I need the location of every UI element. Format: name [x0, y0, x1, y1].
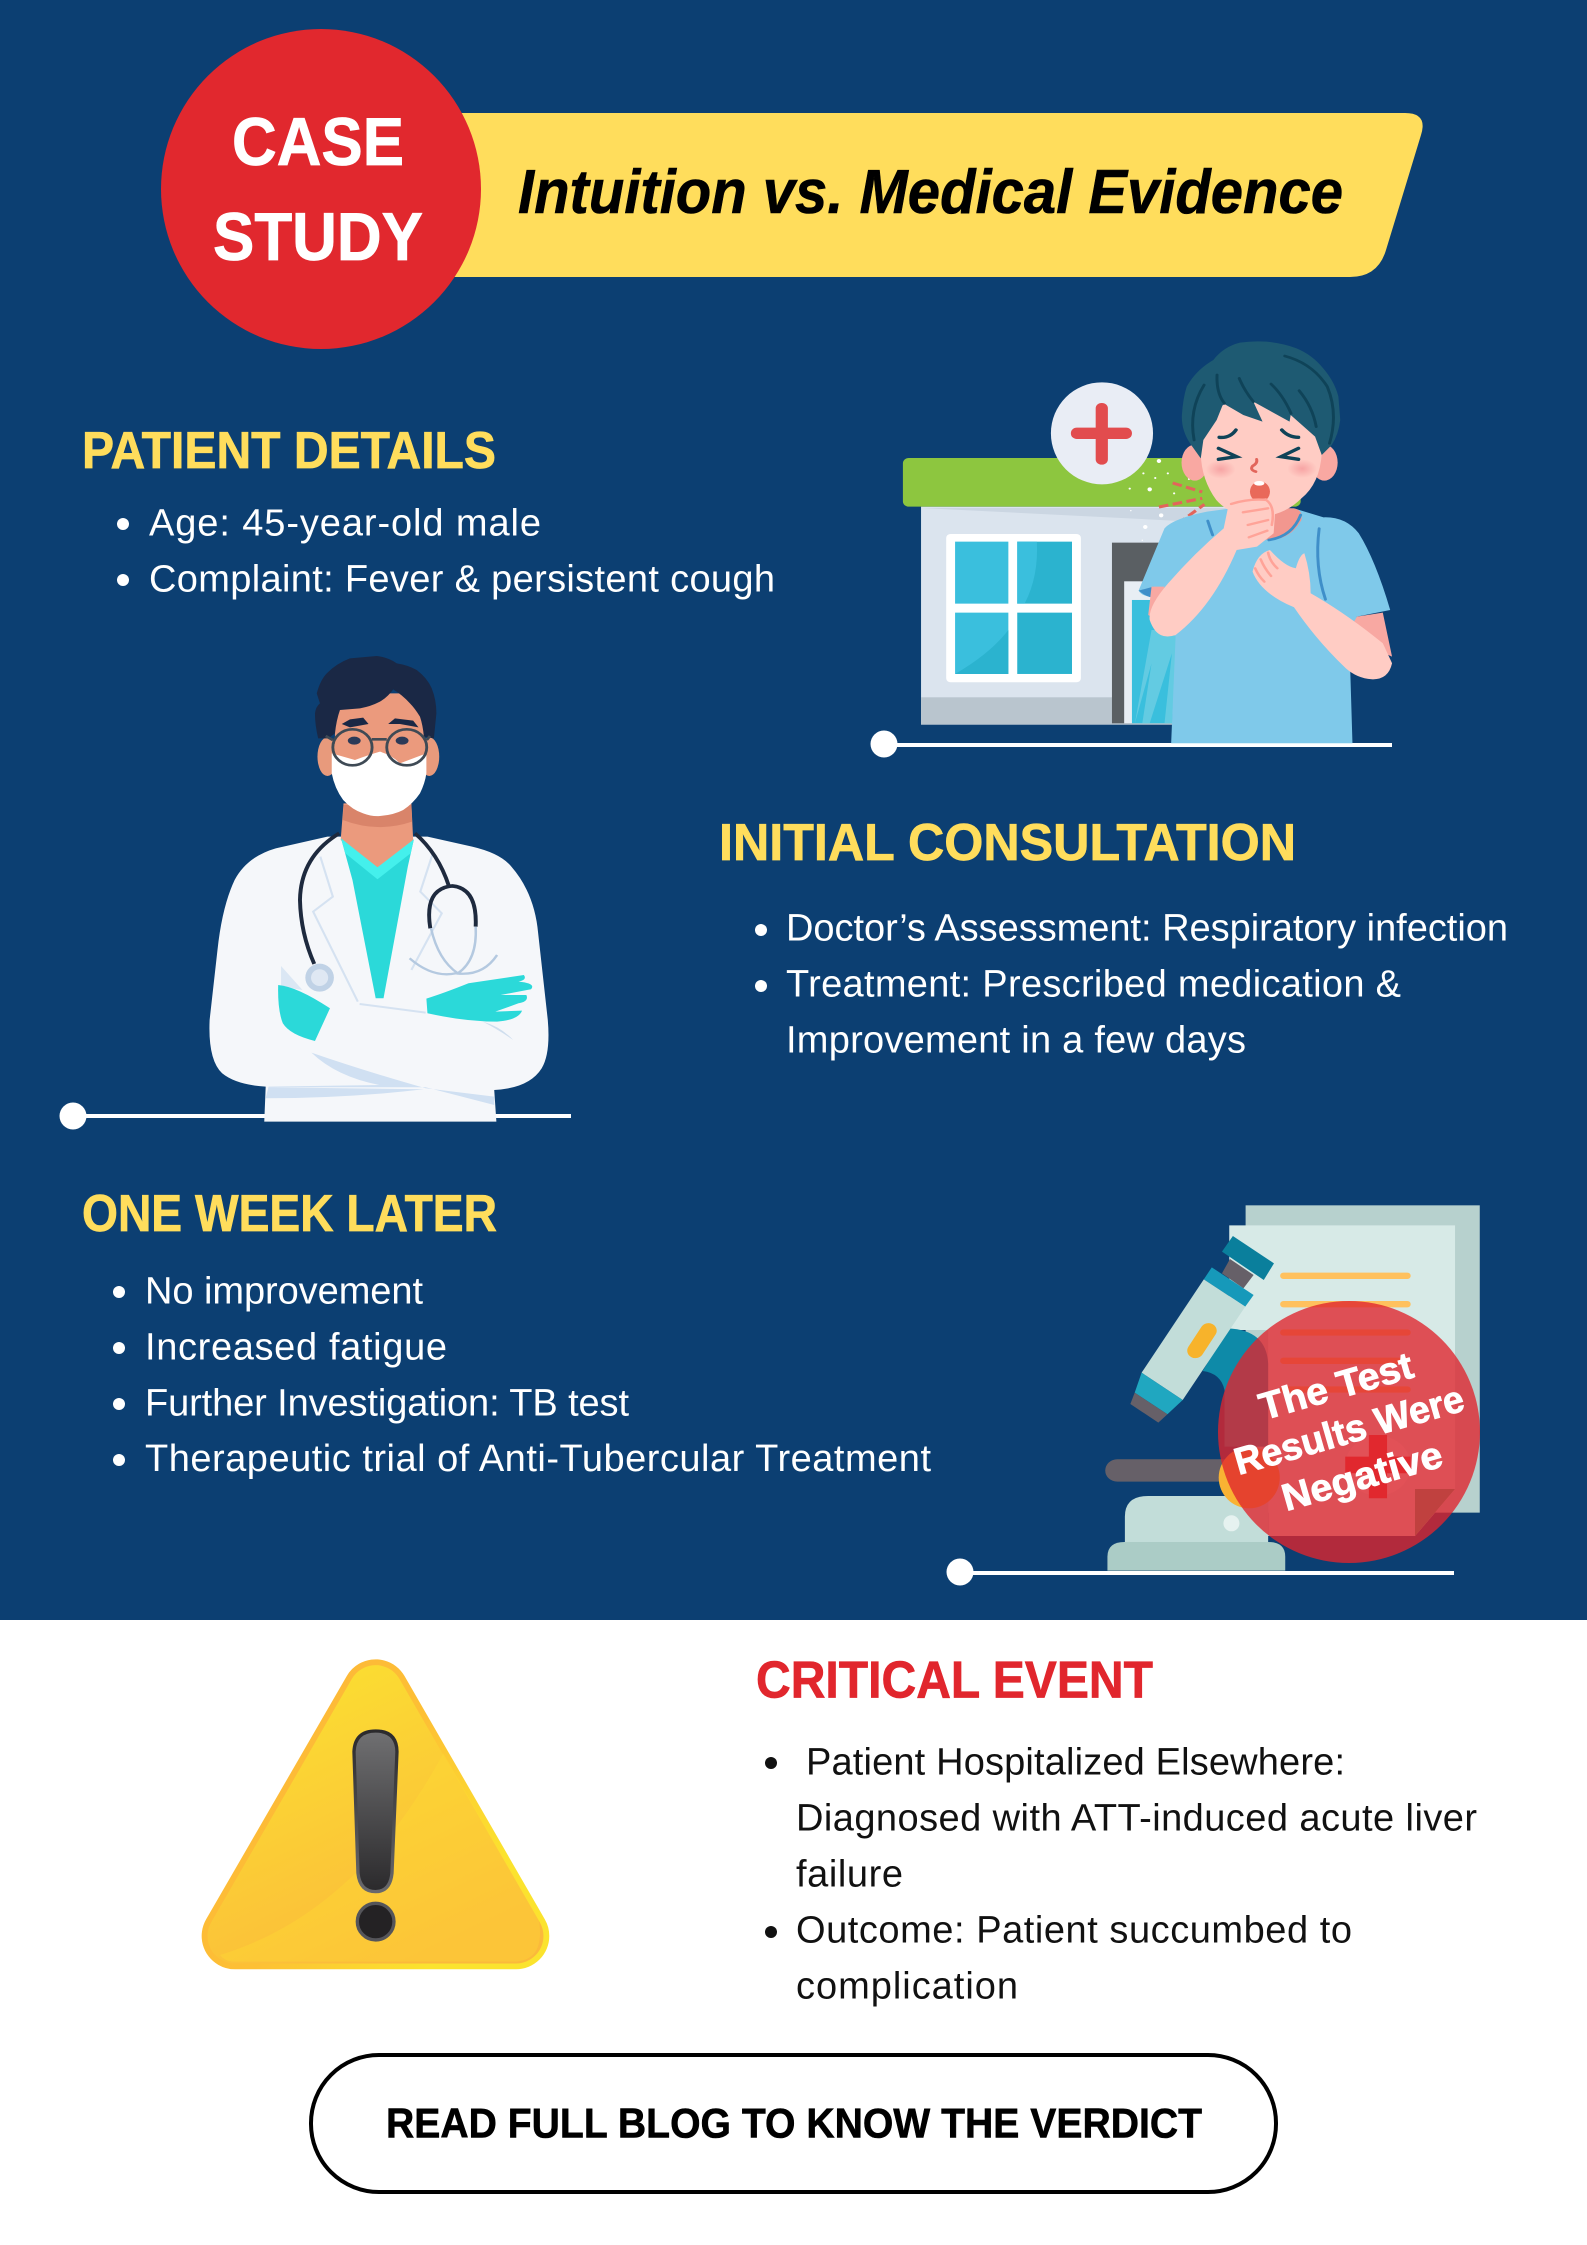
- patient details list: Age: 45-year-old male: [149, 502, 541, 544]
- navy background: [0, 0, 1587, 1620]
- one week later list: Increased fatigue: [145, 1326, 447, 1368]
- doctor head: [315, 656, 439, 816]
- panel: one week later: [82, 1185, 931, 1480]
- white lower panel: [0, 1620, 1587, 2245]
- stethoscope: [300, 833, 497, 992]
- critical event list: failure: [796, 1854, 903, 1896]
- timeline marker: [870, 730, 1392, 758]
- timeline marker: [60, 1102, 571, 1130]
- glasses: [326, 729, 430, 765]
- consultation list: Doctor’s Assessment: Respiratory infection: [786, 908, 1508, 950]
- heading: critical event: CRITICAL EVENT: [756, 1652, 1153, 1710]
- panel: initial consultation: [719, 814, 1508, 1062]
- illustration: coughing patient at clinic: [870, 341, 1392, 758]
- icon: warning triangle: [220, 1693, 540, 1962]
- case study badge: CASE: [232, 104, 404, 180]
- stamp: test results negative: Negative: [1277, 1434, 1447, 1520]
- patient arms and hands: [1150, 498, 1276, 637]
- case study badge: [161, 29, 481, 349]
- report paper: [1229, 1205, 1480, 1536]
- medical cross sign: [1051, 382, 1153, 484]
- panel: patient details: [82, 422, 775, 600]
- stamp: test results negative: Results Were: [1230, 1378, 1469, 1484]
- patient neck: [1227, 507, 1302, 540]
- illustration: doctor with mask and stethoscope: [60, 656, 571, 1130]
- crossed arms gloves: [278, 975, 532, 1041]
- heading: one week later: ONE WEEK LATER: [82, 1185, 497, 1243]
- doctor eyebrows: [342, 718, 419, 727]
- coat shading: [266, 853, 513, 1105]
- heading: initial consultation: INITIAL CONSULTATION: [719, 814, 1296, 872]
- critical event list: complication: [796, 1966, 1018, 2008]
- doctor hair: [315, 656, 436, 738]
- doctor eyes: [348, 737, 361, 745]
- one week later list: No improvement: [145, 1270, 423, 1312]
- panel: critical event: [756, 1652, 1477, 2008]
- patient eyes and brows: [1219, 430, 1298, 459]
- face mask: [332, 752, 426, 816]
- one week later list: Therapeutic trial of Anti-Tubercular Treatment: [145, 1438, 931, 1480]
- title ribbon: [400, 113, 1423, 277]
- call to action button: READ FULL BLOG TO KNOW THE VERDICT: [386, 2100, 1202, 2146]
- patient mouth and nose: [1250, 481, 1270, 502]
- stamp: test results negative: The Test: [1255, 1345, 1418, 1429]
- patient details list: Complaint: Fever & persistent cough: [149, 558, 775, 600]
- title text: Intuition vs. Medical Evidence: [518, 158, 1343, 227]
- stamp: test results negative: [1218, 1301, 1480, 1563]
- case study badge: STUDY: [213, 199, 423, 275]
- consultation list: Treatment: Prescribed medication &: [786, 964, 1401, 1006]
- microscope: [1105, 1236, 1285, 1571]
- patient hair: [1182, 341, 1340, 458]
- critical event list: [765, 1742, 1477, 2008]
- header banner: [161, 29, 1423, 349]
- patient face: [1201, 395, 1322, 517]
- critical event list: Diagnosed with ATT-induced acute liver: [796, 1798, 1477, 1840]
- one week later list: [113, 1270, 931, 1480]
- teal scrubs: [341, 838, 414, 998]
- call to action button: [311, 2055, 1276, 2192]
- illustration: microscope and test report: [946, 1205, 1480, 1586]
- critical event list: Outcome: Patient succumbed to: [796, 1910, 1352, 1952]
- one week later list: Further Investigation: TB test: [145, 1382, 629, 1424]
- heading: patient details: PATIENT DETAILS: [82, 422, 496, 480]
- consultation list: [755, 908, 1508, 1062]
- neck: [341, 803, 413, 868]
- patient ears: [1182, 445, 1208, 481]
- clinic building: [903, 458, 1301, 725]
- consultation list: Improvement in a few days: [786, 1020, 1246, 1062]
- exclamation mark: [354, 1731, 397, 1940]
- critical event list: Patient Hospitalized Elsewhere:: [806, 1742, 1345, 1784]
- timeline marker: [946, 1558, 1454, 1586]
- cough droplets: [1129, 459, 1204, 541]
- patient figure: [1139, 341, 1392, 743]
- patient details list: [117, 502, 775, 600]
- patient shirt: [1139, 508, 1390, 743]
- lab coat: [209, 837, 548, 1122]
